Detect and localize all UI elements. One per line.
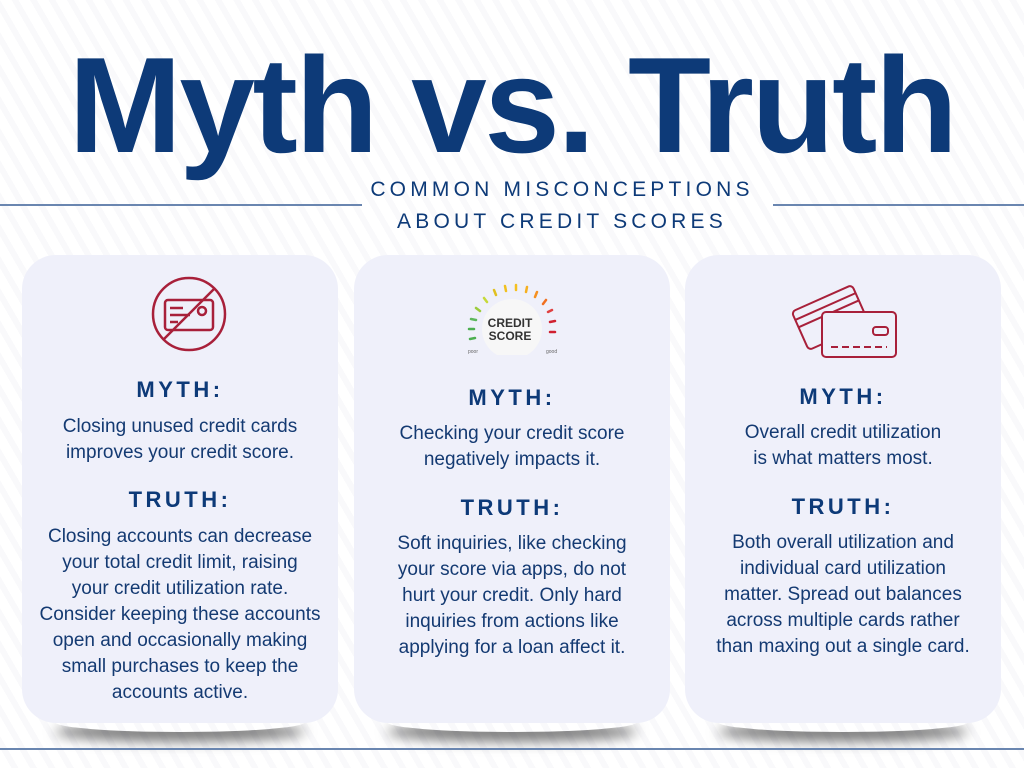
text: truth 2: hurt your credit. Only hard xyxy=(402,585,622,606)
text: truth 3: Both overall utilization and xyxy=(732,532,954,553)
text: myth 1: Closing unused credit cards xyxy=(63,416,297,437)
icon: no credit card xyxy=(152,276,226,352)
subtitle xyxy=(370,178,754,233)
text: truth 1 xyxy=(40,526,320,703)
text: truth 1: open and occasionally making xyxy=(53,630,307,651)
panel: card 1 xyxy=(22,255,338,723)
text: myth 3 xyxy=(745,422,941,469)
heading: myth: MYTH: xyxy=(136,377,224,402)
panel: card 2 xyxy=(354,255,670,723)
icon: credit score gauge: poor xyxy=(468,349,478,355)
text: myth 1 xyxy=(63,416,297,463)
icon: credit score gauge: good xyxy=(546,349,557,355)
text: truth 1: your credit utilization rate. xyxy=(72,578,288,599)
text: myth 3: Overall credit utilization xyxy=(745,422,941,443)
heading: truth: TRUTH: xyxy=(792,494,894,519)
panel: card 3 xyxy=(685,255,1001,723)
text: truth 2: applying for a loan affect it. xyxy=(399,637,625,658)
text: truth 1: Closing accounts can decrease xyxy=(48,526,312,547)
text: truth 3: individual card utilization xyxy=(740,558,946,579)
heading: truth: TRUTH: xyxy=(461,495,563,520)
text: myth 3: is what matters most. xyxy=(753,448,933,469)
text: truth 2: inquiries from actions like xyxy=(405,611,619,632)
text: truth 3: than maxing out a single card. xyxy=(716,636,970,657)
text: truth 1: small purchases to keep the xyxy=(62,656,298,677)
text: truth 1: Consider keeping these accounts xyxy=(40,604,320,625)
text: myth 2: Checking your credit score xyxy=(400,423,624,444)
subtitle: ABOUT CREDIT SCORES xyxy=(397,210,727,233)
icon: credit score gauge: CREDIT xyxy=(488,316,533,330)
text: myth 2: negatively impacts it. xyxy=(424,449,600,470)
text: truth 3 xyxy=(716,532,970,657)
subtitle: COMMON MISCONCEPTIONS xyxy=(370,178,754,201)
text: truth 2 xyxy=(397,533,627,658)
text: truth 1: accounts active. xyxy=(112,682,248,703)
text: truth 3: matter. Spread out balances xyxy=(724,584,962,605)
title: Myth vs. Truth xyxy=(69,29,955,181)
icon: credit score gauge xyxy=(468,284,557,355)
text: truth 2: your score via apps, do not xyxy=(398,559,626,580)
text: truth 3: across multiple cards rather xyxy=(726,610,960,631)
text: truth 2: Soft inquiries, like checking xyxy=(397,533,627,554)
heading: myth: MYTH: xyxy=(799,384,887,409)
heading: truth: TRUTH: xyxy=(129,487,231,512)
heading: myth: MYTH: xyxy=(468,385,556,410)
text: myth 1: improves your credit score. xyxy=(66,442,294,463)
text: myth 2 xyxy=(400,423,624,470)
text: truth 1: your total credit limit, raising xyxy=(62,552,298,573)
icon: two credit cards xyxy=(792,285,897,358)
icon: credit score gauge: SCORE xyxy=(489,329,531,343)
